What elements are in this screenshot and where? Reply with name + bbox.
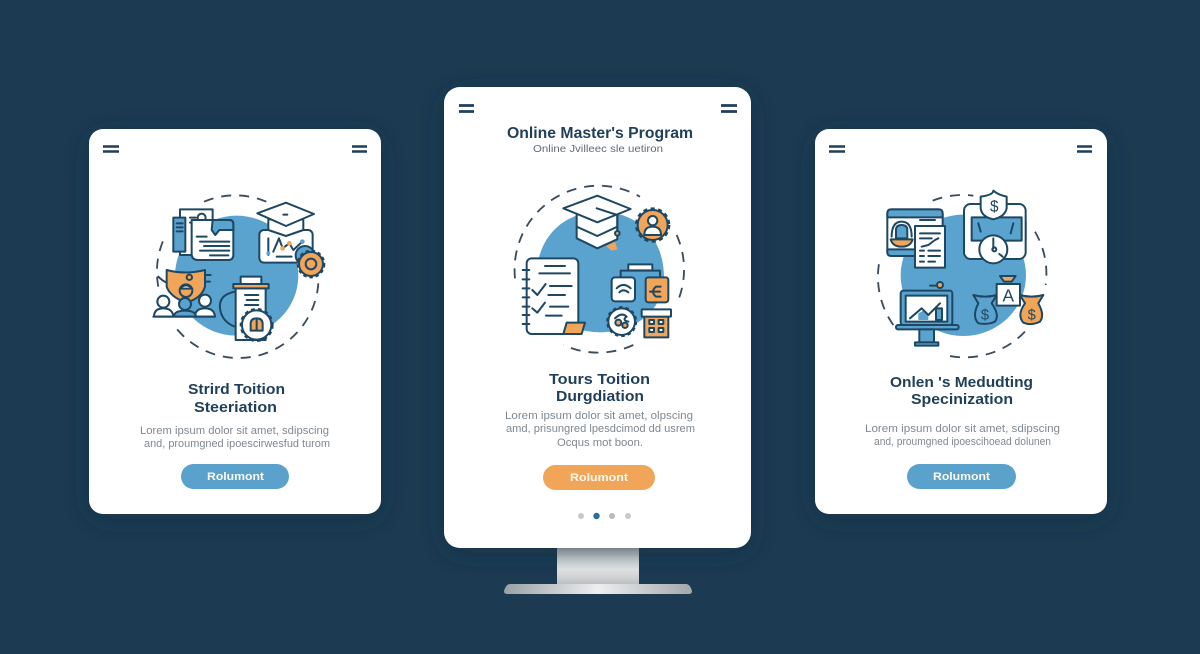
left card heading: Strird Toition bbox=[188, 381, 285, 398]
right card menu icons bbox=[829, 146, 1092, 152]
icon cluster: profile, funding and analytics bbox=[878, 191, 1046, 357]
center card menu icons bbox=[459, 106, 737, 112]
left card body text: Lorem ipsum dolor sit amet, sdipscing bbox=[140, 425, 329, 437]
left card body text bbox=[140, 425, 330, 450]
panel: right card bbox=[815, 129, 1107, 514]
pagination dots bbox=[578, 513, 631, 519]
icon cluster: profile, funding and analytics: $ bbox=[981, 307, 989, 323]
panel: left card bbox=[89, 129, 381, 514]
center card body text: amd, prisungred lpesdcimod dd usrem bbox=[506, 423, 695, 435]
left card button: Rolumont bbox=[207, 471, 264, 483]
center card heading bbox=[549, 371, 650, 405]
right card button bbox=[907, 464, 1016, 489]
left card background bbox=[89, 129, 381, 514]
left card heading: Steeriation bbox=[194, 399, 277, 416]
center card subheading: Online Jvilleec sle uetiron bbox=[533, 144, 663, 155]
center card background bbox=[444, 87, 751, 548]
icon cluster: study, research and team bbox=[153, 195, 324, 358]
center card heading: Tours Toition bbox=[549, 371, 650, 388]
right card heading: Onlen 's Medudting bbox=[890, 374, 1033, 391]
icon cluster: graduation and finance bbox=[515, 186, 684, 353]
center card top heading: Online Master's Program bbox=[507, 125, 693, 142]
right card background bbox=[815, 129, 1107, 514]
center card button bbox=[543, 465, 655, 490]
center card body text: Ocqus mot boon. bbox=[557, 437, 643, 449]
center card button: Rolumont bbox=[570, 472, 628, 484]
right card heading bbox=[890, 374, 1033, 408]
center card body text: Lorem ipsum dolor sit amet, olpscing bbox=[505, 410, 693, 422]
left card heading bbox=[188, 381, 285, 416]
right card body text: Lorem ipsum dolor sit amet, sdipscing bbox=[865, 423, 1060, 435]
center card body text bbox=[505, 410, 695, 449]
left card button bbox=[181, 464, 289, 489]
right card button: Rolumont bbox=[933, 471, 990, 483]
panel: center card bbox=[444, 87, 751, 548]
center card heading: Durgdiation bbox=[556, 388, 644, 405]
right card body text bbox=[865, 423, 1060, 448]
left card menu icons bbox=[103, 146, 367, 152]
left card body text: and, proumgned ipoescirwesfud turom bbox=[144, 438, 330, 450]
monitor stand bbox=[504, 546, 692, 594]
icon cluster: profile, funding and analytics: $ bbox=[990, 199, 999, 216]
icon cluster: profile, funding and analytics: A bbox=[1003, 286, 1015, 306]
right card body text: and, proumgned ipoescihoead dolunen bbox=[874, 436, 1051, 448]
icon cluster: profile, funding and analytics: $ bbox=[1028, 307, 1036, 323]
right card heading: Specinization bbox=[911, 391, 1013, 408]
